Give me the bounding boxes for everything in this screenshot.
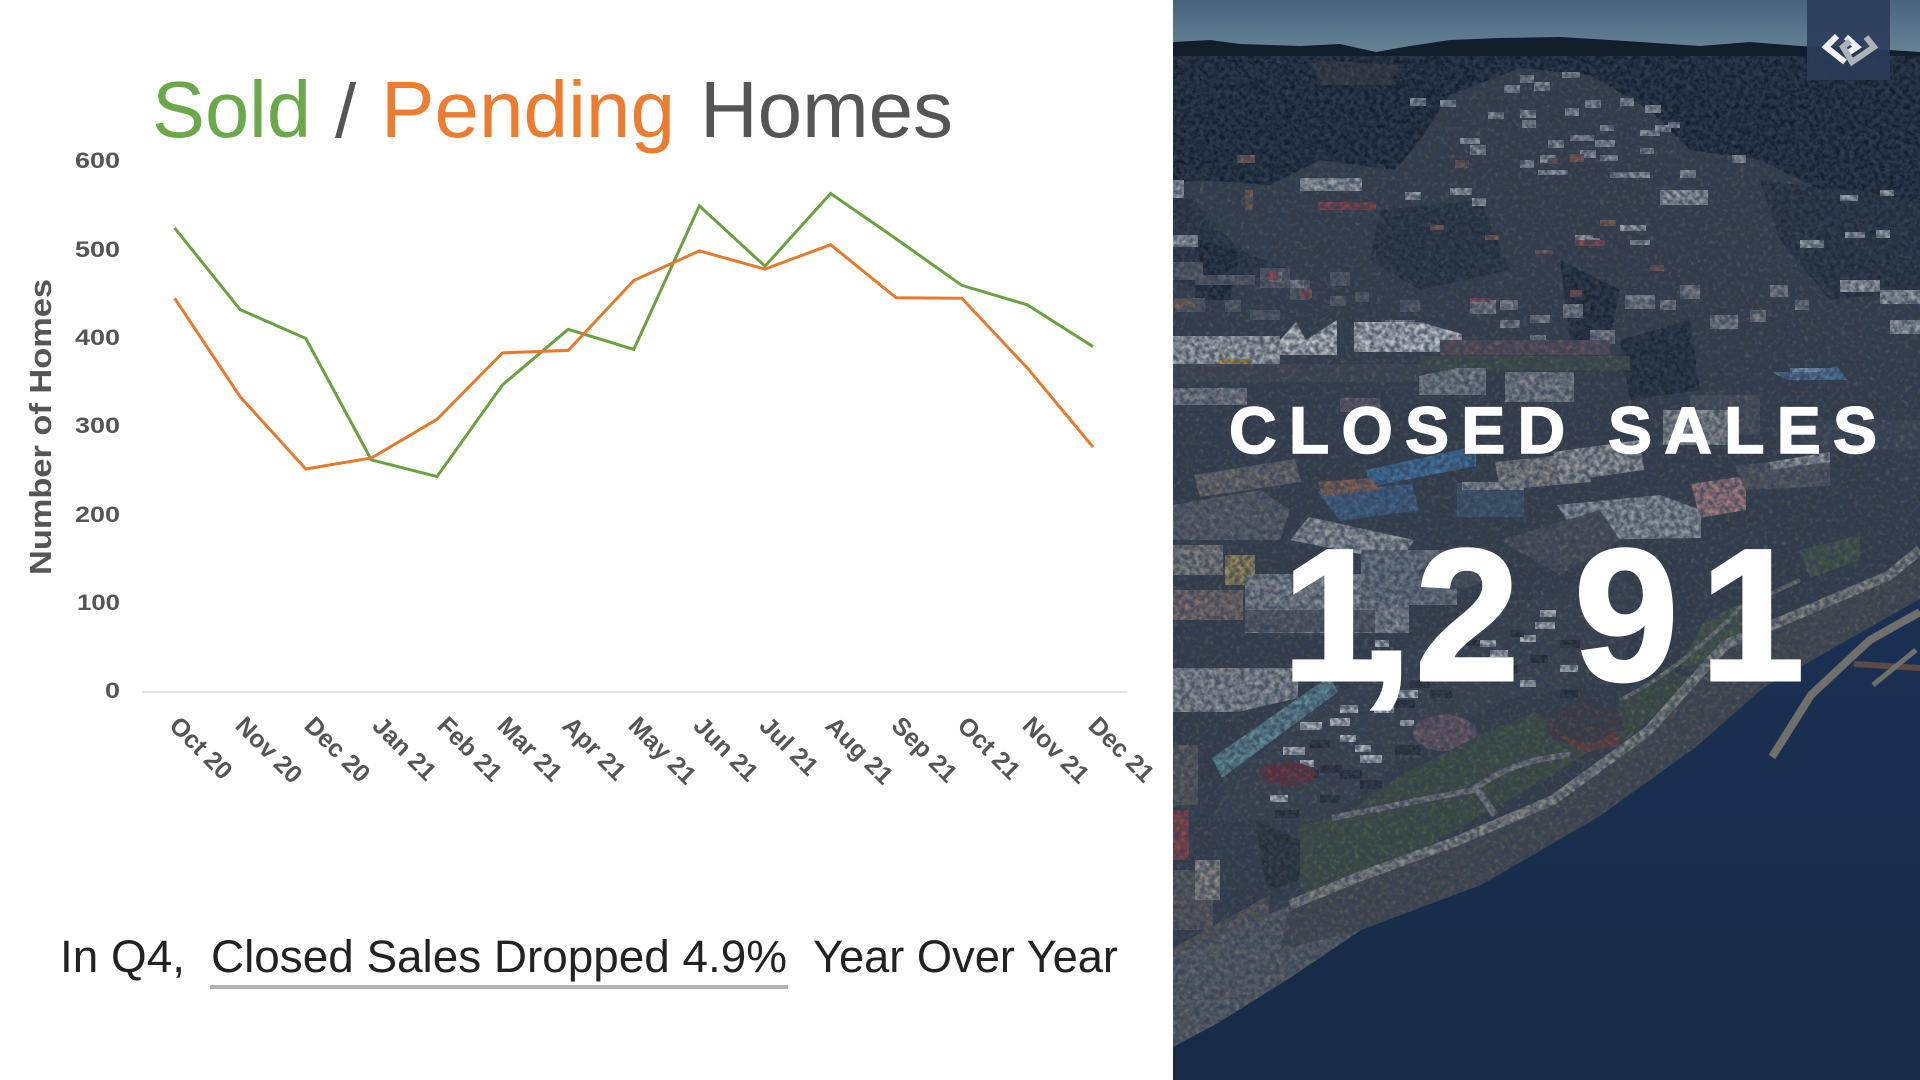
y-axis labels	[75, 148, 120, 703]
sky	[1173, 0, 1920, 52]
caption text: In Q4,	[60, 931, 185, 982]
y-axis labels: 500	[75, 237, 120, 262]
cars dark	[1275, 630, 1580, 818]
y-axis title: Number of Homes	[23, 279, 58, 575]
panel: chart	[0, 0, 1173, 1080]
y-axis labels: 0	[105, 678, 120, 703]
caption text: Closed Sales Dropped 4.9%	[211, 931, 787, 982]
x-axis month labels: Feb 21	[432, 711, 508, 787]
mid-town houses	[1170, 178, 1920, 334]
cars white	[1270, 610, 1578, 802]
x-axis month labels: Apr 21	[557, 711, 632, 786]
forest ridge	[1173, 37, 1920, 200]
y-axis labels: 400	[75, 325, 120, 350]
hillside houses	[1410, 72, 1746, 178]
chart title: Sold	[152, 65, 311, 154]
trees	[1259, 762, 1315, 786]
church and white buildings	[1280, 320, 1337, 355]
land and buildings	[1170, 37, 1920, 1056]
x-axis month labels: Mar 21	[492, 711, 568, 787]
y-axis labels: 600	[75, 148, 120, 173]
x-axis month labels: Nov 21	[1017, 711, 1095, 789]
x-axis month labels: Oct 21	[952, 711, 1026, 785]
parking lot	[1215, 570, 1640, 820]
chart title: Homes	[700, 65, 953, 154]
x-axis month labels: Dec 20	[299, 711, 376, 788]
water	[1173, 560, 1920, 1080]
chart title: /	[335, 69, 357, 154]
x-axis baseline	[142, 691, 1127, 693]
park paths	[1332, 755, 1570, 818]
y-axis labels: 300	[75, 413, 120, 438]
x-axis month labels: May 21	[623, 711, 702, 790]
chart title: Pending	[381, 65, 675, 154]
big number: 1,291: 1,291	[1282, 510, 1805, 720]
rock revetment	[1280, 560, 1920, 950]
icon: windermere double-diamond logo	[1826, 36, 1874, 62]
pink trees	[1440, 340, 1610, 355]
left boats and shops	[1173, 745, 1213, 930]
line: sold homes	[175, 194, 1093, 477]
x-axis month labels: Dec 21	[1083, 711, 1160, 788]
line: pending homes	[175, 245, 1093, 469]
x-axis month labels: Jun 21	[688, 711, 764, 787]
motel building with dark roof	[1173, 660, 1340, 780]
panel: aerial photo of waterfront town	[1170, 0, 1920, 1080]
caption text	[60, 931, 1118, 989]
park lawn	[1290, 712, 1600, 900]
x-axis month labels: Jul 21	[754, 711, 824, 781]
logo tab	[1807, 0, 1890, 80]
x-axis month labels: Jan 21	[367, 711, 442, 786]
x-axis month labels	[164, 711, 1160, 790]
x-axis month labels: Aug 21	[820, 711, 899, 790]
beach	[1173, 905, 1360, 1047]
y-axis labels: 100	[77, 590, 120, 615]
heading: closed sales: CLOSED SALES	[1229, 393, 1877, 467]
y-axis labels: 200	[75, 502, 120, 527]
x-axis month labels: Nov 20	[230, 711, 308, 789]
commercial district	[1663, 410, 1730, 445]
seawall walkway	[1290, 550, 1920, 905]
marina pier	[1772, 612, 1920, 757]
x-axis month labels: Oct 20	[164, 711, 238, 785]
houses along road	[1419, 368, 1486, 395]
x-axis month labels: Sep 21	[886, 711, 963, 788]
gazebo	[1545, 702, 1625, 745]
caption text: Year Over Year	[813, 931, 1118, 982]
chart title	[152, 65, 953, 154]
